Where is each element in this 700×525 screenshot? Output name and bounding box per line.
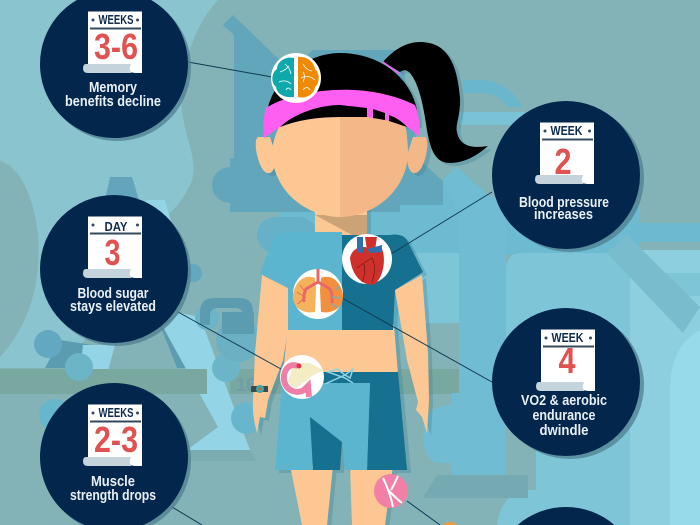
background: gym equipment silhouettes: g [268, 380, 275, 394]
neck shadow [315, 215, 367, 235]
callout: week 2 blood pressure: 2 [554, 141, 572, 182]
icon: brain [271, 53, 321, 103]
headband strap [383, 62, 400, 74]
neck [315, 205, 367, 235]
icon: pancreas [280, 355, 324, 399]
callout: weeks 2-3 muscle: 2-3 [94, 419, 138, 460]
shoelace bow [325, 369, 353, 384]
callout: weeks 3-6 memory: benefits decline [65, 94, 161, 110]
shorts inner fold [310, 417, 342, 470]
watch [251, 385, 268, 393]
fringe left [280, 105, 367, 127]
callout: weeks 2-3 muscle: Muscle [91, 474, 135, 490]
callout: week 2 blood pressure: WEEK [550, 124, 582, 138]
callout: day 3 blood sugar [40, 195, 191, 346]
callout: weeks 2-3 muscle [40, 383, 191, 525]
right leg [350, 465, 393, 525]
callout: week 4 VO2 [492, 308, 644, 459]
callout: week 2 blood pressure: Blood pressure [519, 195, 609, 211]
shorts dark [285, 372, 407, 470]
callout: week 4 VO2: endurance [532, 408, 596, 424]
icon: muscle [374, 474, 408, 508]
callout: weeks 2-3 muscle: WEEKS [98, 406, 134, 420]
left leg [290, 465, 333, 525]
icon: lungs [293, 269, 343, 319]
callout: partial bottom circle [518, 507, 614, 525]
callout: week 4 VO2: dwindle [540, 423, 588, 439]
callout: week 4 VO2: WEEK [552, 331, 584, 345]
background: gym equipment silhouettes: 16 [236, 375, 256, 395]
callout: weeks 2-3 muscle: strength drops [70, 488, 156, 504]
hair [267, 53, 418, 130]
callout: week 2 blood pressure [492, 101, 644, 252]
callout: day 3 blood sugar: 3 [104, 232, 120, 273]
callout: weeks 3-6 memory: WEEKS [98, 13, 134, 27]
callout: week 4 VO2: 4 [558, 340, 576, 381]
figure: woman in workout clothes [251, 42, 488, 525]
face left half [272, 117, 340, 217]
callout: day 3 blood sugar: stays elevated [70, 299, 156, 315]
shorts light [275, 383, 370, 470]
callout: week 2 blood pressure: increases [534, 207, 593, 223]
shirt light half [260, 232, 342, 330]
callout: weeks 3-6 memory: Memory [89, 80, 137, 96]
torso [283, 325, 398, 375]
left arm [253, 275, 288, 433]
ear right [407, 137, 427, 173]
callout: day 3 blood sugar: Blood sugar [78, 286, 149, 302]
ear left [256, 137, 276, 173]
callout: week 4 VO2: VO2 & aerobic [521, 393, 607, 409]
callout: weeks 3-6 memory: 3-6 [94, 26, 138, 67]
right arm [395, 275, 429, 433]
headband [263, 90, 420, 138]
figure body with shadow [253, 42, 488, 525]
icon: heart [342, 234, 392, 285]
ponytail [383, 42, 488, 163]
callout: day 3 blood sugar: DAY [104, 220, 128, 234]
face right half [340, 115, 408, 217]
shirt dark half [342, 235, 423, 330]
connector lines [172, 62, 492, 525]
fringe right [373, 109, 407, 127]
icon: orange organ partial [443, 522, 457, 525]
callout: weeks 3-6 memory [40, 0, 191, 141]
